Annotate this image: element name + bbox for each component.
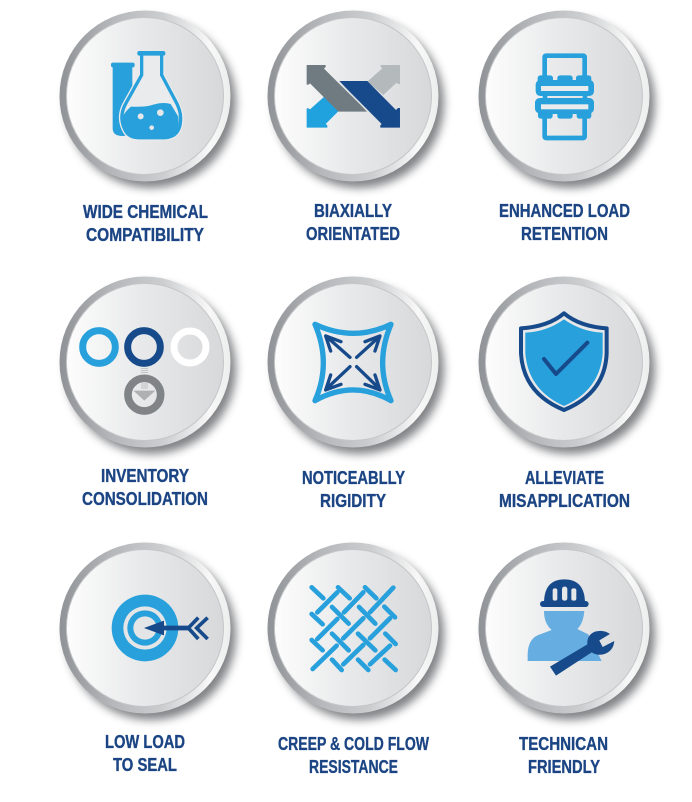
label [519, 734, 608, 777]
label: RESISTANCE [309, 757, 398, 777]
label: RETENTION [521, 224, 608, 244]
icon: target and arrow [112, 595, 208, 661]
icon: test tube and flask [111, 51, 181, 138]
panel: biaxially orientated [268, 10, 444, 244]
icon: woven mesh [312, 587, 396, 670]
label: NOTICEABLLY [302, 468, 405, 488]
button disc [268, 10, 444, 188]
button disc [478, 10, 655, 188]
label: LOW LOAD [105, 732, 185, 752]
panel: enhanced load retention [478, 10, 655, 244]
icon: shield with check mark [521, 313, 607, 410]
icon: stretched square with arrows [315, 324, 391, 401]
label: TECHNICAN [519, 734, 608, 754]
panel: noticeably rigidity [268, 276, 444, 511]
label: WIDE CHEMICAL [83, 202, 208, 222]
button disc [60, 542, 236, 720]
panel: creep and cold flow resistance [268, 542, 444, 777]
button disc [268, 276, 444, 454]
button disc [60, 10, 236, 188]
label [82, 466, 208, 509]
label [306, 201, 400, 244]
icon: crossing arrows [307, 65, 400, 128]
button disc [268, 542, 444, 720]
label: ALLEVIATE [525, 468, 604, 488]
panel: technican friendly [478, 542, 655, 777]
label [499, 468, 630, 511]
label: CREEP & COLD FLOW [278, 734, 429, 754]
panel: wide chemical compatibility [60, 10, 236, 245]
icon: worker with wrench [528, 579, 614, 676]
label: ORIENTATED [306, 224, 400, 244]
label [105, 732, 185, 775]
label: COMPATIBILITY [86, 225, 204, 245]
label: MISAPPLICATION [499, 491, 630, 511]
label: ENHANCED LOAD [499, 201, 630, 221]
label: BIAXIALLY [314, 201, 392, 221]
icon: rings consolidating [83, 331, 206, 411]
label: RIGIDITY [320, 491, 386, 511]
label: INVENTORY [101, 466, 189, 486]
label: TO SEAL [113, 755, 177, 775]
panel: alleviate misapplication [478, 276, 655, 511]
label [302, 468, 405, 511]
button disc [478, 276, 655, 454]
icon: flanged joint [535, 56, 594, 138]
label [499, 201, 630, 244]
label [83, 202, 208, 245]
panel: inventory consolidation [60, 276, 236, 509]
label: CONSOLIDATION [82, 489, 208, 509]
label: FRIENDLY [528, 757, 600, 777]
button disc [60, 276, 236, 454]
label [278, 734, 429, 777]
panel: low load to seal [60, 542, 236, 775]
button disc [478, 542, 655, 720]
